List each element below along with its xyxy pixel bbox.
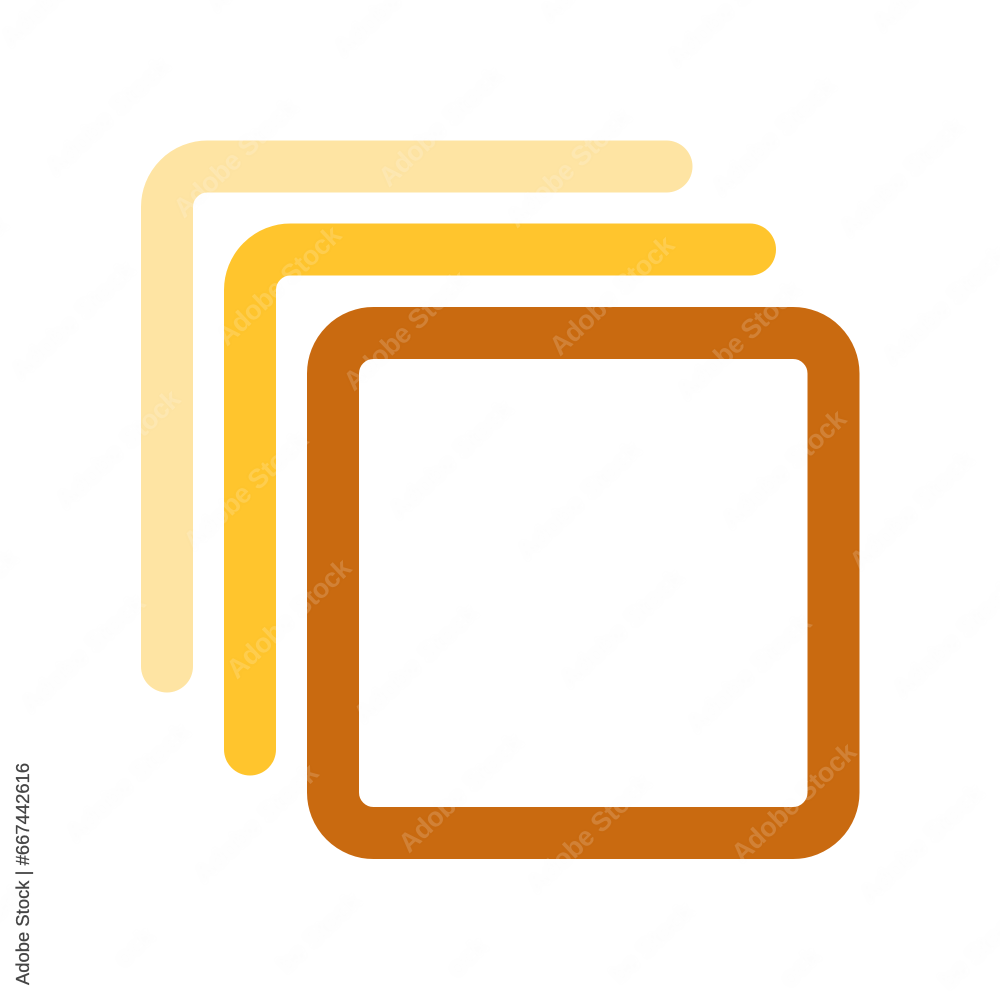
- icon: front layer, brown rounded square: [333, 333, 834, 833]
- watermark pattern: repeated Adobe Stock text: Adobe Stock: [167, 91, 305, 223]
- watermark pattern: repeated Adobe Stock text: Adobe Stock: [4, 254, 142, 386]
- watermark pattern: repeated Adobe Stock text: be Stock: [603, 895, 701, 989]
- watermark pattern: repeated Adobe Stock text: Adobe Stock: [853, 777, 991, 909]
- watermark pattern: repeated Adobe Stock text: Adobe Stock: [372, 60, 510, 192]
- watermark pattern: repeated Adobe Stock text: ock: [440, 930, 494, 983]
- watermark pattern: repeated Adobe Stock text: Adobe Stock: [59, 716, 197, 848]
- watermark pattern: repeated Adobe Stock text: Adobe Stock: [670, 274, 808, 406]
- watermark pattern: repeated Adobe Stock text: ock: [107, 920, 161, 973]
- watermark pattern: repeated Adobe Stock text: Adobe Stock: [543, 229, 681, 361]
- watermark pattern: repeated Adobe Stock text: Adobe Stock: [843, 444, 981, 576]
- watermark pattern: repeated Adobe Stock text: Adobe Stock: [49, 383, 187, 515]
- watermark pattern: repeated Adobe Stock text: Adobe Stock: [833, 111, 971, 243]
- watermark pattern: repeated Adobe Stock text: Adobe Stock: [187, 757, 325, 889]
- watermark pattern: repeated Adobe Stock text: Adobe Stock: [39, 50, 177, 182]
- watermark pattern: repeated Adobe Stock text: Adobe Stock: [500, 101, 638, 233]
- watermark pattern: repeated Adobe Stock text: be Stock: [270, 885, 368, 979]
- watermark pattern: repeated Adobe Stock text: Adobe Stock: [520, 767, 658, 899]
- icon: back layer, pale yellow corner stroke: [167, 166, 666, 666]
- watermark pattern: repeated Adobe Stock text: Adobe Stock: [392, 726, 530, 858]
- watermark pattern: repeated Adobe Stock text: Adobe Stock: [725, 736, 863, 868]
- watermark pattern: repeated Adobe Stock text: Adobe Stock: [382, 393, 520, 525]
- watermark pattern: repeated Adobe Stock text: Adobe Stock: [220, 552, 358, 684]
- watermark pattern: repeated Adobe Stock text: Adobe Stock: [553, 562, 691, 694]
- stock credit: vertical text: Adobe Stock | #667442616: [12, 763, 33, 985]
- watermark pattern: repeated Adobe Stock text: ock: [773, 940, 827, 993]
- watermark pattern: repeated Adobe Stock text: Adobe Stock: [337, 264, 475, 396]
- watermark pattern: repeated Adobe Stock text: Adobe Stock: [210, 219, 348, 351]
- watermark pattern: repeated Adobe Stock text: Adobe Stock: [715, 403, 853, 535]
- watermark pattern: repeated Adobe Stock text: Adobe Stock: [510, 434, 648, 566]
- watermark pattern: repeated Adobe Stock text: Adobe Stock: [705, 70, 843, 202]
- watermark pattern: repeated Adobe Stock text: Adobe Stock: [680, 607, 818, 739]
- watermark pattern: repeated Adobe Stock text: Adobe Stock: [14, 587, 152, 719]
- watermark pattern: repeated Adobe Stock text: Adobe Stock: [177, 424, 315, 556]
- watermark pattern: repeated Adobe Stock text: Adobe Stock: [347, 597, 485, 729]
- icon: middle layer, amber corner stroke: [250, 250, 750, 750]
